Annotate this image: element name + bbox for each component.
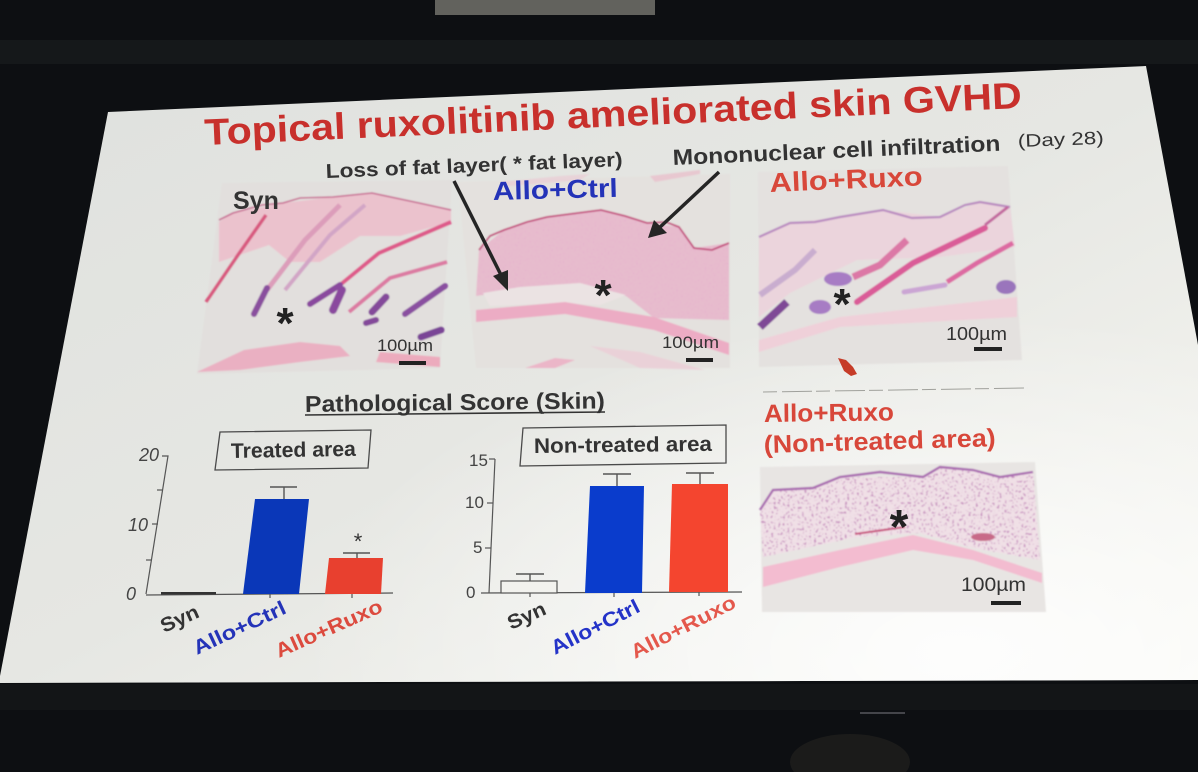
bar: Allo+Ctrl (585, 474, 644, 593)
y axis values: 15 (469, 451, 488, 470)
scale bar (377, 336, 433, 365)
fat layer asterisk: * (594, 271, 612, 320)
category labels (157, 596, 386, 663)
label: Syn: Syn (233, 187, 279, 215)
heading: pathological score: Pathological Score (Skin) (305, 387, 605, 417)
scale bar: 100µm (377, 336, 433, 355)
y axis values: 10 (128, 515, 148, 535)
bar chart: non-treated area (465, 425, 742, 663)
day label: (Day 28) (1017, 128, 1104, 151)
histology image: Allo+Ruxo non-treated (760, 462, 1046, 612)
y axis values: 0 (126, 584, 136, 604)
fat layer asterisk: * (890, 501, 909, 554)
scale bar (662, 333, 719, 362)
chart label box: treated area: Treated area (231, 438, 356, 463)
category labels: Allo+Ctrl (547, 596, 644, 659)
fat layer asterisk: * (276, 299, 294, 348)
scale bar: 100µm (961, 575, 1026, 596)
y axis values: 20 (138, 445, 159, 465)
y axis values: 5 (473, 538, 482, 557)
label: Allo+Ruxo non-treated area (763, 398, 996, 459)
title: Topical ruxolitinib ameliorated skin GVHD (204, 75, 1023, 153)
annotation: loss of fat layer: Loss of fat layer( * fat layer) (325, 149, 623, 183)
arrow: loss of fat layer (454, 181, 508, 291)
bar: Allo+Ruxo (669, 473, 728, 592)
significance marker: * (354, 529, 363, 554)
label: Allo+Ctrl: Allo+Ctrl (492, 173, 618, 206)
axes (481, 459, 742, 597)
histology image: Allo+Ruxo (758, 166, 1022, 367)
chart label box: non-treated area: Non-treated area (534, 433, 712, 458)
category labels: Allo+Ruxo (272, 596, 386, 663)
category labels (504, 592, 740, 663)
histology image: Syn (197, 180, 452, 374)
icon: red pointer cursor (838, 358, 857, 376)
chart label box: non-treated area (520, 425, 726, 466)
category labels: Syn (157, 601, 203, 638)
bar: Syn (161, 592, 216, 594)
y axis values: 0 (466, 583, 475, 602)
arrow: mononuclear infiltration (648, 172, 719, 238)
scale bar (946, 324, 1007, 351)
category labels: Syn (504, 598, 550, 635)
category labels: Allo+Ctrl (190, 597, 290, 660)
annotation: mononuclear cell infiltration: Mononuclear cell infiltration (672, 131, 1001, 170)
fat layer asterisk: * (833, 280, 851, 329)
scale bar: 100µm (946, 324, 1007, 344)
label: Allo+Ruxo: Allo+Ruxo (769, 161, 923, 198)
y axis values (126, 445, 159, 604)
label: Allo+Ruxo non-treated area: Allo+Ruxo (764, 398, 894, 428)
histology image: Allo+Ctrl (458, 170, 730, 370)
category labels: Allo+Ruxo (627, 592, 740, 663)
chart label box: treated area (215, 430, 371, 470)
axes (146, 456, 393, 598)
slide surface (0, 66, 1198, 683)
bar: Syn (501, 574, 557, 593)
scale bar: 100µm (662, 333, 719, 352)
label: Allo+Ruxo non-treated area: (Non-treated area) (763, 424, 996, 459)
scale bar (961, 575, 1026, 605)
bar: Allo+Ctrl (243, 487, 309, 594)
bar chart: treated area (126, 430, 393, 663)
bar: Allo+Ruxo (325, 553, 383, 594)
y axis values: 10 (465, 493, 484, 512)
y axis values (465, 451, 488, 602)
